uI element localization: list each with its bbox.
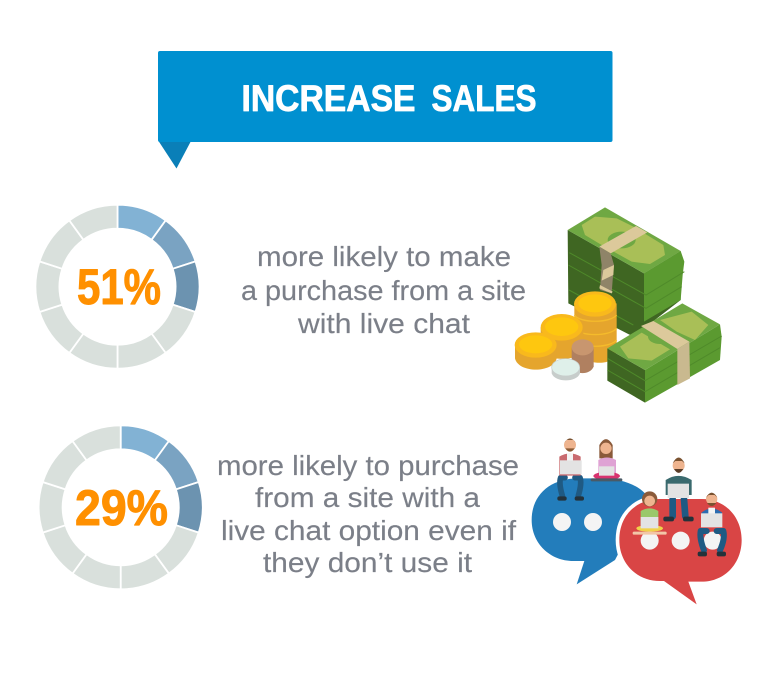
banner tail — [158, 141, 191, 168]
title: SALES — [432, 78, 536, 119]
person: standing man — [663, 457, 694, 521]
text block: first statistic: more likely to make — [257, 241, 511, 272]
text block: second statistic: live chat option even if — [221, 515, 516, 546]
stat value: 29%: 29% — [75, 480, 168, 536]
stat value: 51%: 51% — [77, 259, 161, 315]
front cash stack — [607, 303, 722, 403]
text block: second statistic: they don’t use it — [263, 547, 472, 578]
highlighted segments — [118, 205, 200, 312]
donut chart: 51% — [35, 205, 200, 369]
silver coin stack — [552, 359, 580, 380]
person: woman on blue bubble — [591, 439, 622, 481]
gold coin stacks — [515, 291, 617, 370]
banner body — [158, 51, 612, 142]
text block: first statistic: with live chat — [297, 308, 470, 339]
title: INCREASE — [242, 78, 416, 119]
text block: first statistic — [241, 241, 526, 339]
copper coin stack — [572, 339, 594, 373]
remaining segments — [39, 425, 199, 589]
red speech bubble — [619, 499, 742, 604]
title banner — [158, 51, 612, 168]
text block: second statistic — [217, 450, 519, 578]
person: woman on red bubble — [633, 491, 667, 535]
text block: second statistic: from a site with a — [255, 482, 480, 513]
text block: second statistic: more likely to purchase — [217, 450, 519, 481]
title — [242, 78, 536, 119]
person: seated man on right — [698, 493, 726, 556]
person: man on blue bubble — [557, 438, 584, 501]
icon: money and coins — [515, 207, 722, 403]
blue speech bubble — [532, 478, 645, 584]
donut chart: 29% — [39, 425, 203, 589]
text block: first statistic: a purchase from a site — [241, 275, 526, 306]
back cash stack — [568, 207, 684, 337]
highlighted segments — [121, 425, 203, 533]
icon: chat bubbles with people — [532, 438, 742, 604]
remaining segments — [35, 205, 196, 369]
